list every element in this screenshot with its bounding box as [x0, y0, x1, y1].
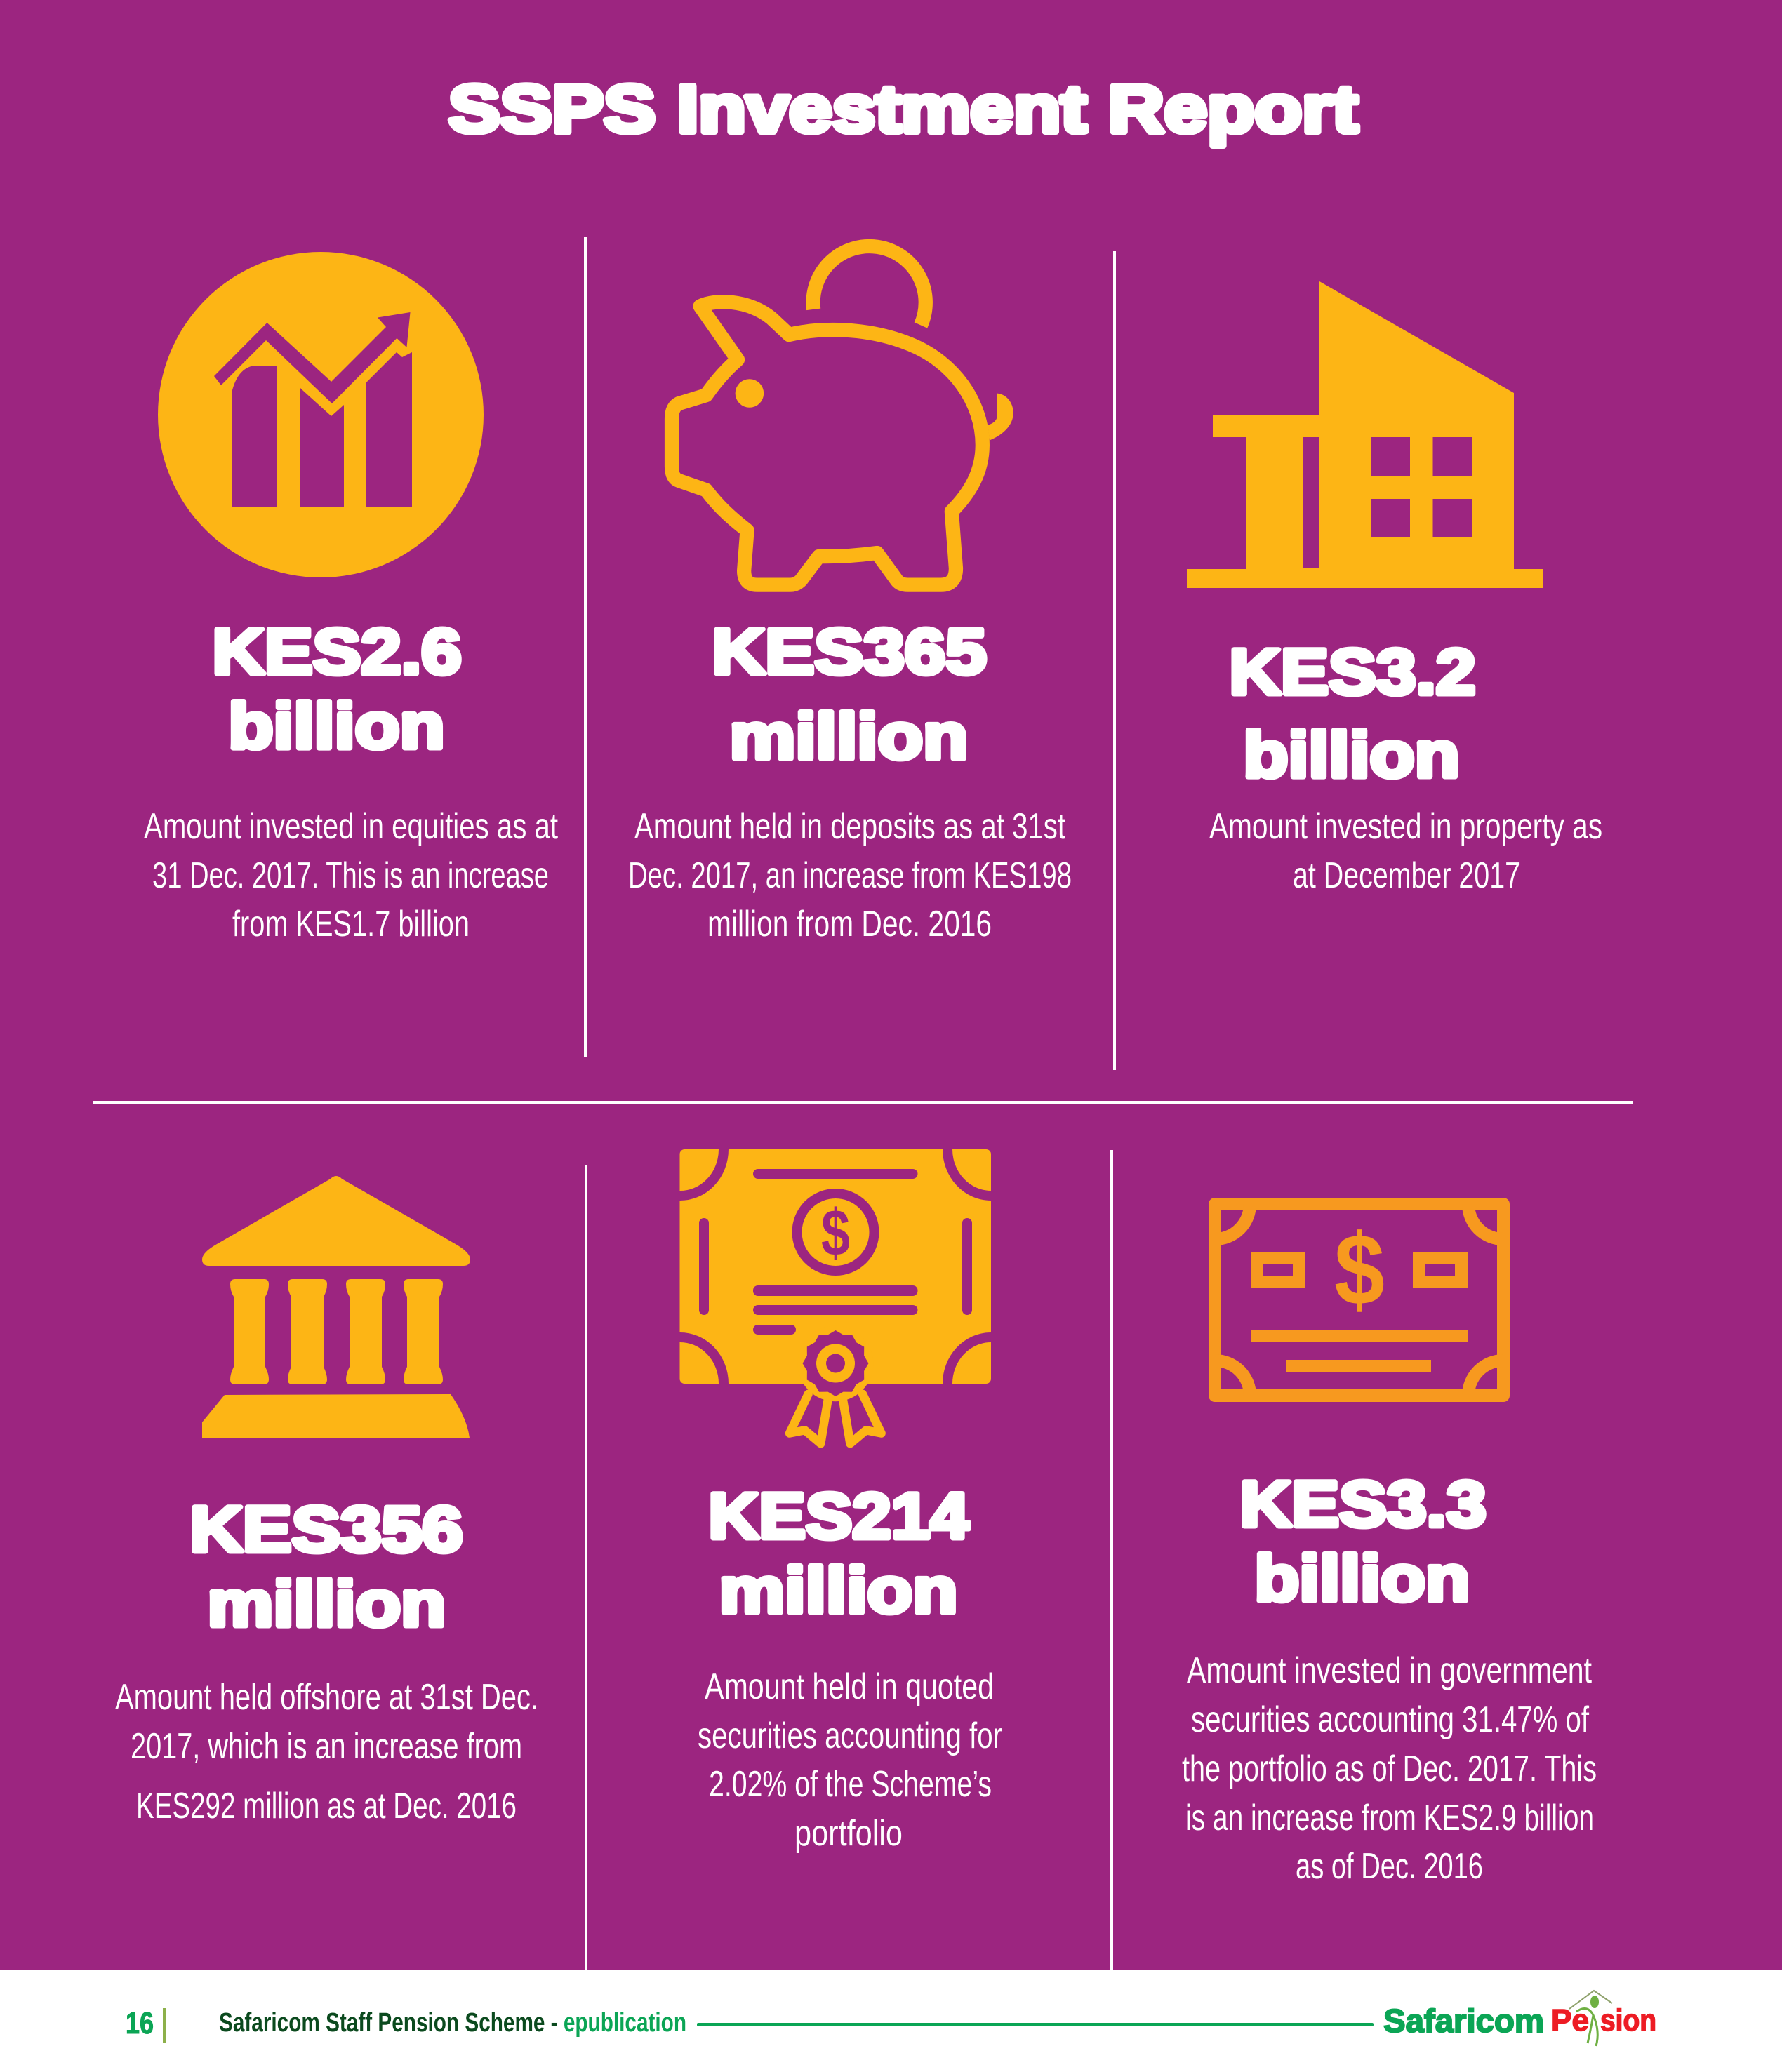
icon: building: [1187, 281, 1543, 588]
panel: equities: [144, 252, 558, 944]
value: KES3.3 billion: billion: [1255, 1543, 1470, 1615]
description: equities: [144, 806, 558, 944]
logo: Safaricom Pension: Pe: [1551, 2003, 1589, 2038]
icon: certificate with ribbon: [679, 1149, 991, 1443]
icon: bank building: [202, 1176, 470, 1438]
value: KES2.6 billion: KES2.6: [212, 616, 462, 688]
description: quoted securities: [698, 1666, 1002, 1854]
value: KES356 million: million: [208, 1568, 446, 1640]
footer: [0, 1970, 1782, 2072]
description: government securities: is an increase from KES2.9 billion: [1185, 1798, 1594, 1838]
description: property: [1209, 806, 1602, 896]
description: deposits: [628, 806, 1072, 944]
logo: Safaricom Pension: sion: [1600, 2003, 1656, 2038]
description: deposits: million from Dec. 2016: [707, 904, 992, 944]
value: KES214 million: million: [719, 1555, 957, 1626]
description: deposits: Dec. 2017, an increase from KES198: [628, 855, 1072, 896]
description: offshore: KES292 million as at Dec. 2016: [136, 1786, 517, 1826]
value: KES365 million: [712, 616, 987, 773]
description: property: at December 2017: [1293, 855, 1520, 896]
description: equities: from KES1.7 billion: [232, 904, 470, 944]
description: offshore: Amount held offshore at 31st Dec.: [115, 1677, 538, 1718]
panel: offshore: [115, 1176, 538, 1826]
description: quoted securities: 2.02% of the Scheme’s: [709, 1764, 992, 1805]
value: KES3.3 billion: KES3.3: [1239, 1469, 1487, 1540]
panel: government securities: [1182, 1204, 1597, 1887]
panel: deposits: [628, 246, 1072, 944]
description: property: Amount invested in property as: [1209, 806, 1602, 847]
title: SSPS Investment Report: [448, 72, 1358, 147]
description: offshore: [115, 1677, 538, 1826]
description: government securities: securities accounting 31.47% of: [1191, 1699, 1589, 1740]
description: government securities: the portfolio as of Dec. 2017. This: [1182, 1749, 1597, 1789]
panel: property: [1187, 281, 1602, 896]
icon: certificate with ribbon: $: [821, 1196, 850, 1269]
description: deposits: Amount held in deposits as at 31st: [634, 806, 1065, 847]
value: KES3.2 billion: [1230, 636, 1475, 791]
description: quoted securities: securities accounting for: [698, 1716, 1002, 1756]
value: KES365 million: million: [730, 701, 969, 773]
description: quoted securities: portfolio: [794, 1813, 903, 1854]
icon: piggy bank: [672, 246, 1013, 585]
value: KES365 million: KES365: [712, 616, 987, 688]
panel: quoted securities: [679, 1149, 1002, 1854]
value: KES3.2 billion: billion: [1244, 719, 1460, 791]
page number: 16: [126, 2006, 154, 2040]
icon: banknote: $: [1334, 1213, 1385, 1326]
value: KES3.3 billion: [1239, 1469, 1487, 1615]
icon: banknote: [1215, 1204, 1503, 1396]
description: equities: Amount invested in equities as at: [144, 806, 558, 847]
value: KES3.2 billion: KES3.2: [1230, 636, 1475, 708]
description: offshore: 2017, which is an increase from: [131, 1726, 522, 1767]
logo: Safaricom Pension: Safaricom: [1383, 2003, 1544, 2039]
description: quoted securities: Amount held in quoted: [705, 1666, 994, 1707]
publication name: Safaricom Staff Pension Scheme - epublication: [219, 2008, 686, 2038]
description: government securities: Amount invested in government: [1187, 1650, 1592, 1691]
value: KES2.6 billion: billion: [229, 690, 445, 762]
icon: chart in circle: [158, 252, 484, 577]
value: KES2.6 billion: [212, 616, 462, 762]
description: equities: 31 Dec. 2017. This is an increase: [152, 855, 549, 896]
value: KES356 million: KES356: [189, 1494, 463, 1565]
value: KES214 million: KES214: [709, 1481, 969, 1552]
logo: Safaricom Pension: [1383, 1991, 1656, 2046]
description: government securities: [1182, 1650, 1597, 1887]
value: KES356 million: [189, 1494, 463, 1640]
description: government securities: as of Dec. 2016: [1296, 1846, 1483, 1887]
value: KES214 million: [709, 1481, 969, 1626]
